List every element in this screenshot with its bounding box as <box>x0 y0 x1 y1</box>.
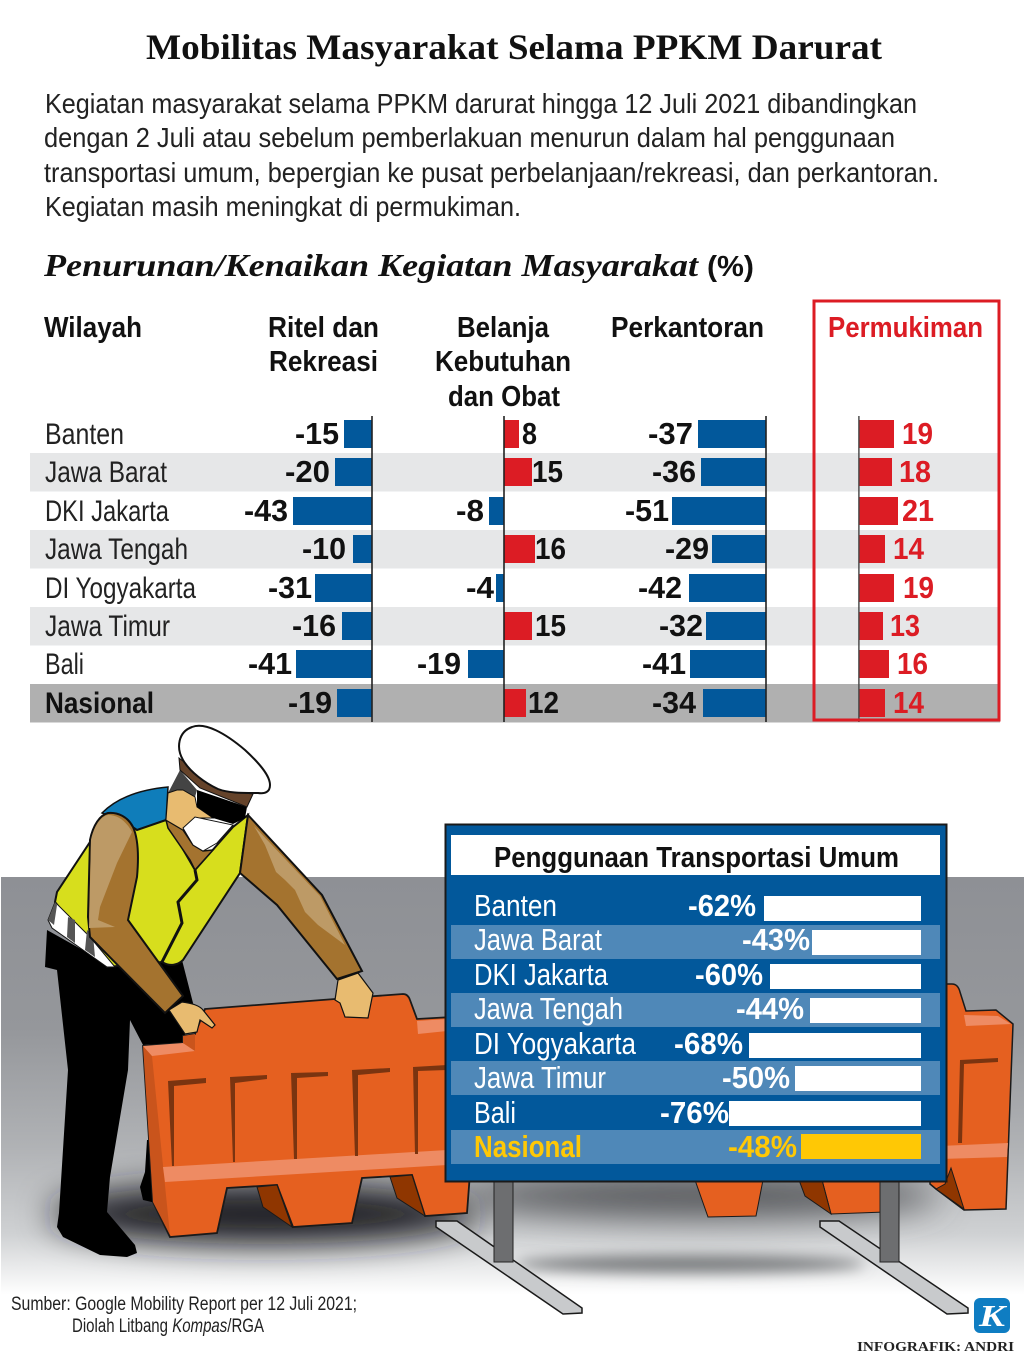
chart: permukiman <box>858 416 934 722</box>
chart: belanja kebutuhan dan obat <box>417 416 566 722</box>
reflective strip <box>48 902 115 967</box>
transport values: -76% <box>660 1095 729 1130</box>
region labels: Jawa Timur <box>45 610 170 643</box>
chart: ritel dan rekreasi: -20 <box>285 454 330 489</box>
chart: belanja kebutuhan dan obat: 12 <box>528 685 559 720</box>
transport labels: Banten <box>474 888 557 923</box>
hand left <box>169 1002 215 1034</box>
chart: belanja kebutuhan dan obat: -8 <box>456 493 484 528</box>
chart: permukiman: 14 <box>893 531 925 566</box>
vest blue <box>102 787 168 830</box>
road background <box>1 877 1024 1312</box>
transport values: -60% <box>695 957 763 992</box>
chart: perkantoran: -29 <box>665 531 709 566</box>
chart: perkantoran <box>625 416 767 722</box>
neck and collar <box>166 820 213 870</box>
transport values: -48% <box>728 1129 797 1164</box>
column headers: Permukiman <box>828 312 983 344</box>
cap top <box>179 726 270 793</box>
chart: ritel dan rekreasi: -15 <box>295 416 339 451</box>
chart: ritel dan rekreasi <box>244 416 373 722</box>
transport values: -50% <box>722 1060 790 1095</box>
transport values <box>660 888 810 1164</box>
transport values: -68% <box>674 1026 743 1061</box>
chart: belanja kebutuhan dan obat: 16 <box>535 531 566 566</box>
hair <box>168 770 197 797</box>
intro text block: Kegiatan masyarakat selama PPKM darurat hingga 12 Juli 2021 dibandingkan <box>45 88 917 119</box>
panel heading: Penggunaan Transportasi Umum <box>494 842 899 874</box>
logo: Kompas K <box>974 1298 1010 1333</box>
left arm highlight <box>89 815 132 928</box>
column headers <box>44 312 983 413</box>
chart: permukiman: 13 <box>890 608 920 643</box>
chart: ritel dan rekreasi: -10 <box>302 531 346 566</box>
vest yellow <box>55 815 248 967</box>
logo: Kompas K: K <box>978 1298 1008 1333</box>
chart: permukiman: 18 <box>899 454 931 489</box>
intro text block: Kegiatan masih meningkat di permukiman. <box>45 191 521 222</box>
region labels: Bali <box>45 648 84 681</box>
highlight box: permukiman <box>814 301 999 720</box>
source note: Diolah Litbang Kompas/RGA <box>72 1316 264 1337</box>
chart: belanja kebutuhan dan obat: -19 <box>417 646 461 681</box>
region labels: DI Yogyakarta <box>45 572 196 605</box>
chart: perkantoran: -42 <box>638 570 682 605</box>
transport labels: DI Yogyakarta <box>474 1026 637 1061</box>
region labels: Jawa Barat <box>45 456 168 489</box>
sign stands <box>436 1182 968 1314</box>
transport labels <box>474 888 637 1164</box>
title: Mobilitas Masyarakat Selama PPKM Darurat <box>146 27 882 67</box>
trousers and boot <box>45 930 193 1257</box>
left arm <box>88 813 183 1013</box>
intro text block: dengan 2 Juli atau sebelum pemberlakuan menurun dalam hal penggunaan <box>44 122 895 153</box>
chart: perkantoran: -37 <box>648 416 693 451</box>
column headers: Kebutuhan <box>435 346 571 378</box>
illustration: left barrier <box>143 973 470 1237</box>
region labels: DKI Jakarta <box>45 495 169 528</box>
chart: belanja kebutuhan dan obat: 15 <box>532 454 563 489</box>
chart: belanja kebutuhan dan obat: -4 <box>466 570 495 605</box>
column headers: dan Obat <box>448 381 560 413</box>
chart: ritel dan rekreasi: -41 <box>248 646 292 681</box>
column headers: Rekreasi <box>269 346 378 378</box>
transport labels: Bali <box>474 1095 516 1130</box>
chart: perkantoran: -41 <box>642 646 686 681</box>
transport labels: Nasional <box>474 1129 582 1164</box>
chart: perkantoran: -32 <box>659 608 703 643</box>
vest blue right <box>233 815 248 832</box>
region labels: Nasional <box>45 687 154 720</box>
table: mobility by region <box>30 301 1000 722</box>
chart: permukiman: 19 <box>902 416 933 451</box>
panel: penggunaan transportasi umum <box>446 824 946 1182</box>
chart: belanja kebutuhan dan obat: 8 <box>522 416 537 451</box>
chart: ritel dan rekreasi: -31 <box>268 570 312 605</box>
row bands <box>30 453 1000 722</box>
strip shading <box>48 902 95 957</box>
column headers: Wilayah <box>44 312 142 344</box>
row bands <box>451 925 940 1164</box>
barrier slots <box>168 1065 447 1166</box>
column headers: Ritel dan <box>268 312 379 344</box>
hand right <box>335 973 373 1018</box>
right arm highlight <box>254 826 345 945</box>
chart: permukiman: 21 <box>902 493 934 528</box>
source note: Sumber: Google Mobility Report per 12 Juli 2021; <box>11 1294 357 1315</box>
table subheading: (%) <box>707 251 754 283</box>
transport values: -62% <box>688 888 756 923</box>
region labels: Jawa Tengah <box>45 533 188 566</box>
right arm <box>240 815 362 979</box>
chart: permukiman: 14 <box>893 685 925 720</box>
region labels <box>45 418 196 720</box>
back foot <box>140 1140 160 1203</box>
face mask <box>183 817 233 851</box>
transport labels: Jawa Timur <box>474 1060 606 1095</box>
illustration: right barrier <box>695 984 1013 1217</box>
chart: permukiman: 16 <box>897 646 928 681</box>
transport labels: DKI Jakarta <box>474 957 609 992</box>
vest zipper <box>162 870 197 962</box>
intro text block: transportasi umum, bepergian ke pusat perbelanjaan/rekreasi, dan perkantoran. <box>44 157 939 188</box>
transport values: -44% <box>736 991 804 1026</box>
column headers: Belanja <box>457 312 550 344</box>
transport labels: Jawa Tengah <box>474 991 623 1026</box>
transport bars <box>729 896 921 1159</box>
source note <box>11 1294 357 1337</box>
chart: belanja kebutuhan dan obat: 15 <box>535 608 566 643</box>
chart: ritel dan rekreasi: -16 <box>292 608 336 643</box>
chart: ritel dan rekreasi: -19 <box>288 685 332 720</box>
credit: INFOGRAFIK: ANDRI <box>857 1340 1014 1355</box>
chart: ritel dan rekreasi: -43 <box>244 493 288 528</box>
intro text block <box>44 88 939 222</box>
chart: perkantoran: -34 <box>652 685 697 720</box>
face <box>166 790 213 830</box>
chart: perkantoran: -51 <box>625 493 669 528</box>
illustration: police officer <box>45 726 362 1257</box>
chart: permukiman: 19 <box>903 570 934 605</box>
chart: perkantoran: -36 <box>652 454 696 489</box>
sunglasses <box>197 790 247 824</box>
column headers: Perkantoran <box>611 312 764 344</box>
cap band <box>179 758 253 807</box>
table subheading: Penurunan/Kenaikan Kegiatan Masyarakat <box>43 247 699 283</box>
transport values: -43% <box>742 922 810 957</box>
transport labels: Jawa Barat <box>474 922 602 957</box>
region labels: Banten <box>45 418 124 451</box>
